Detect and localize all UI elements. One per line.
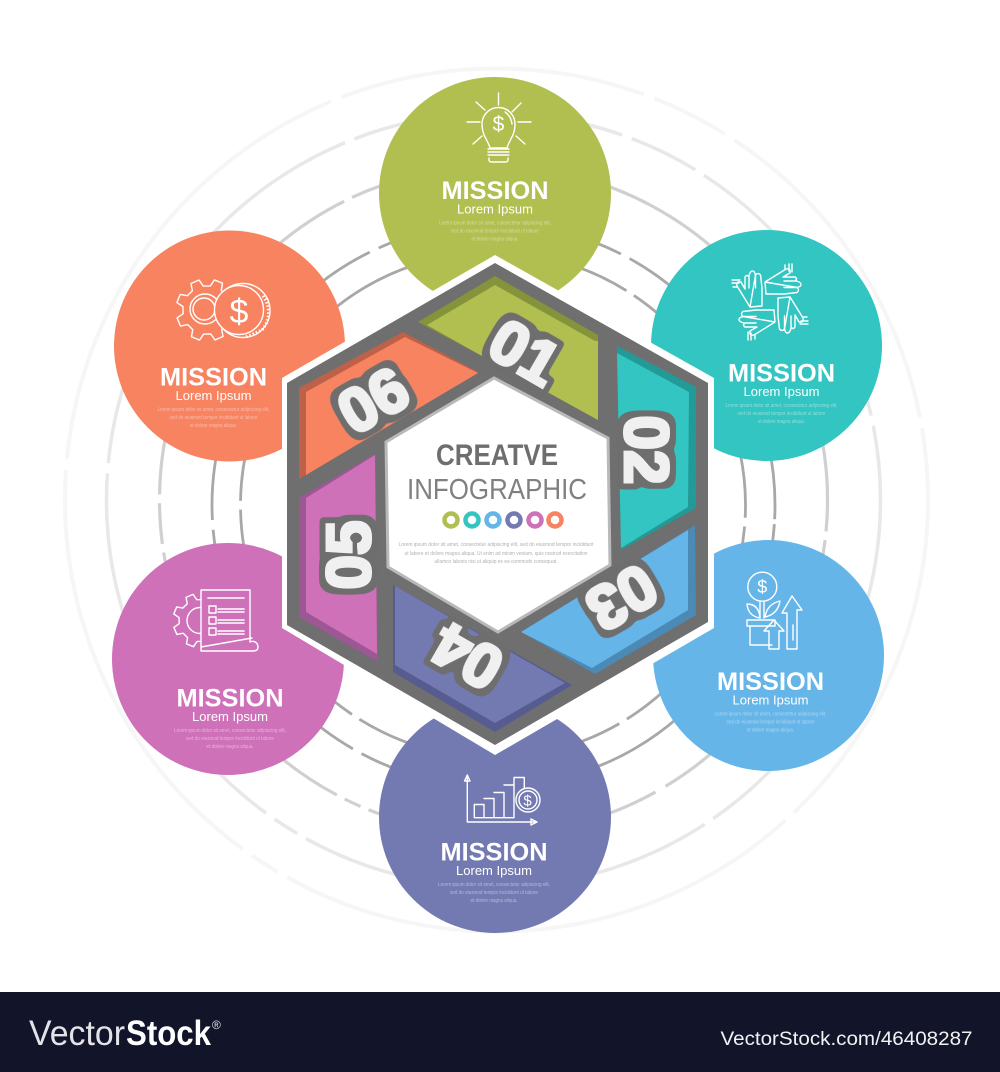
text block 01 bbox=[439, 177, 551, 242]
text block 06: Lorem ipsum dolor sit amet, consectetur adipiscing elit, bbox=[158, 407, 270, 413]
text block 04: MISSION bbox=[440, 838, 548, 866]
panel 04 bbox=[393, 585, 572, 732]
number 03: 03 bbox=[574, 550, 668, 644]
text block 04: Lorem Ipsum bbox=[456, 863, 532, 878]
circle 05 purple bbox=[112, 543, 344, 775]
number 02: 02 bbox=[611, 416, 680, 484]
icon: gear and coin bbox=[167, 270, 270, 350]
text block 02: Lorem ipsum dolor sit amet, consectetur adipiscing elit, bbox=[726, 403, 838, 409]
text block 05: MISSION bbox=[176, 684, 284, 712]
footer banner: Stock bbox=[126, 1014, 211, 1053]
text block 03: sed do eiusmod tempor incididunt ut labore bbox=[726, 720, 815, 726]
number 05: 05 bbox=[315, 521, 384, 589]
icon: bar chart with coin bbox=[464, 775, 540, 825]
center title: INFOGRAPHIC bbox=[407, 474, 587, 506]
text block 02: Lorem Ipsum bbox=[744, 384, 820, 399]
text block 01: MISSION bbox=[442, 177, 548, 205]
number 04: 04 bbox=[420, 608, 515, 703]
panel 05 bbox=[299, 454, 378, 662]
center body text bbox=[398, 542, 594, 565]
text block 06: MISSION bbox=[160, 364, 267, 392]
circle 03 blue bbox=[653, 540, 884, 771]
text block 06: sed do eiusmod tempor incididunt ut labore bbox=[170, 415, 258, 421]
hexagon gray frame bbox=[287, 263, 708, 745]
text block 03: Lorem Ipsum bbox=[732, 692, 808, 708]
icon: gear and checklist bbox=[165, 586, 258, 655]
icon: light bulb with dollar bbox=[467, 93, 531, 162]
text block 06: Lorem Ipsum bbox=[176, 388, 252, 403]
text block 01: et dolore magna aliqua. bbox=[472, 236, 518, 242]
hexagon white outline bbox=[282, 255, 714, 755]
icon: four hands bbox=[732, 264, 808, 340]
icon: light bulb with dollar: $ bbox=[493, 113, 505, 136]
panel 01 bbox=[418, 276, 598, 420]
center hexagon bbox=[386, 378, 610, 632]
center body text: Lorem ipsum dolor sit amet, consectetur adipiscing elit, sed do eiusmod tempor incididunt bbox=[398, 542, 594, 548]
icon: gear and coin: $ bbox=[230, 293, 249, 331]
text block 02 bbox=[726, 360, 838, 425]
text block 04: Lorem ipsum dolor sit amet, consectetur adipiscing elit, bbox=[438, 882, 550, 888]
panel 03 bbox=[521, 525, 696, 674]
footer banner: Vector bbox=[29, 1014, 125, 1053]
center body text: ut labore et dolore magna aliqua. Ut enim ad minim veniam, quis nostrud exercitation bbox=[404, 551, 588, 557]
circle 02 teal bbox=[651, 230, 882, 461]
panel 02 bbox=[617, 346, 696, 550]
text block 05 bbox=[174, 684, 286, 750]
text block 06 bbox=[158, 364, 270, 429]
icon: plant with arrows: $ bbox=[757, 577, 767, 597]
center title bbox=[407, 439, 587, 506]
text block 02: sed do eiusmod tempor incididunt ut labore bbox=[738, 411, 826, 417]
text block 02: MISSION bbox=[728, 360, 835, 388]
text block 01: sed do eiusmod tempor incididunt ut labore bbox=[451, 228, 539, 234]
text block 05: Lorem Ipsum bbox=[192, 709, 268, 724]
text block 06: et dolore magna aliqua. bbox=[190, 423, 237, 429]
center body text: ullamco laboris nisi ut aliquip ex ea commodo consequat. bbox=[434, 559, 558, 565]
footer banner: ® bbox=[212, 1018, 221, 1032]
text block 03 bbox=[714, 668, 826, 734]
text block 03: et dolore magna aliqua. bbox=[747, 728, 794, 734]
text block 02: et dolore magna aliqua. bbox=[758, 419, 805, 425]
text block 04: et dolore magna aliqua. bbox=[470, 898, 518, 904]
circle 04 indigo bbox=[379, 701, 611, 933]
text block 01: Lorem ipsum dolor sit amet, consectetur adipiscing elit, bbox=[439, 220, 551, 226]
number 06: 06 bbox=[327, 354, 421, 448]
center color dots bbox=[444, 514, 562, 526]
text block 03: Lorem ipsum dolor sit amet, consectetur adipiscing elit, bbox=[714, 712, 826, 718]
text block 05: Lorem ipsum dolor sit amet, consectetur adipiscing elit, bbox=[174, 728, 286, 734]
icon: bar chart with coin: $ bbox=[523, 792, 532, 810]
footer banner: VectorStock.com/46408287 bbox=[720, 1028, 972, 1050]
panel 06 bbox=[299, 332, 478, 479]
text block 05: et dolore magna aliqua. bbox=[206, 744, 254, 750]
text block 04: sed do eiusmod tempor incididunt ut labore bbox=[450, 890, 538, 896]
text block 05: sed do eiusmod tempor incididunt ut labore bbox=[186, 736, 274, 742]
circle 06 orange bbox=[114, 230, 345, 462]
text block 04 bbox=[438, 838, 550, 904]
icon: plant with arrows bbox=[747, 572, 802, 649]
footer banner bbox=[0, 992, 1000, 1072]
number 01: 01 bbox=[477, 306, 571, 400]
text block 03: MISSION bbox=[717, 668, 824, 696]
center title: CREATVE bbox=[436, 439, 558, 472]
circle 01 olive bbox=[379, 77, 611, 309]
text block 01: Lorem Ipsum bbox=[457, 202, 533, 216]
